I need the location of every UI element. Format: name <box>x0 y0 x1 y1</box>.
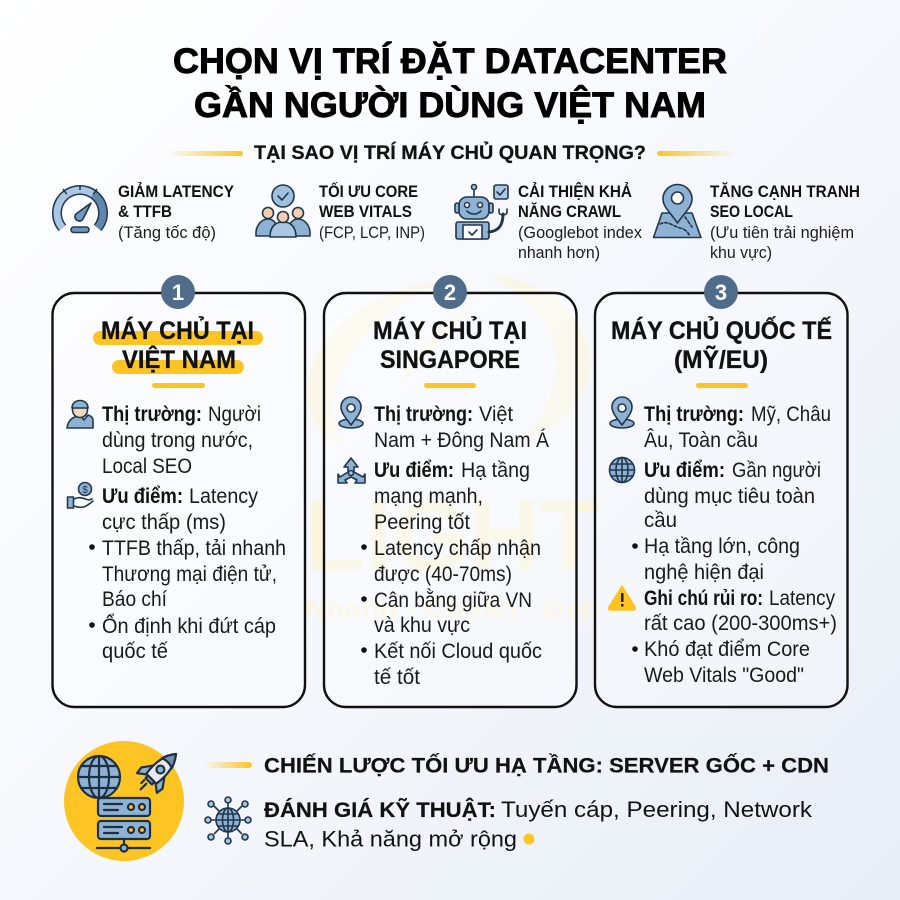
benefit: crawl: nhanh hơn) <box>518 244 600 262</box>
market text: Người <box>208 403 261 426</box>
subtitle with flanking lines <box>165 142 735 164</box>
card title: MÁY CHỦ TẠI <box>373 315 527 345</box>
benefit: local seo: (Ưu tiên trải nghiệm <box>710 224 854 242</box>
bullet list: Báo chí <box>102 588 167 611</box>
benefit: crawl: NĂNG CRAWL <box>518 202 621 221</box>
title <box>173 41 727 125</box>
watermark: LIGHT logo <box>305 275 600 623</box>
icon: user <box>67 400 93 428</box>
risk note: Khó đạt điểm Core <box>644 638 810 661</box>
bullet list: nghệ hiện đại <box>644 561 764 584</box>
bullet list: và khu vực <box>374 614 470 637</box>
technical evaluation text <box>264 797 813 852</box>
number badge 3 <box>704 275 738 309</box>
bullet list: Hạ tầng lớn, công <box>644 535 800 558</box>
risk note <box>632 587 837 687</box>
risk note: Ghi chú rủi ro: <box>644 587 763 610</box>
icon: location pin <box>339 397 363 428</box>
benefit: local seo: khu vực) <box>710 244 772 262</box>
strategy heading: CHIẾN LƯỢC TỐI ƯU HẠ TẦNG: SERVER GỐC + CDN <box>264 752 829 778</box>
market text: Nam + Đông Nam Á <box>374 429 549 452</box>
market text: Thị trường: <box>102 403 202 426</box>
icon: location pin <box>610 397 634 428</box>
benefit: crawl: (Googlebot index <box>518 224 643 242</box>
icon: speedometer <box>57 185 103 232</box>
benefit: local seo: SEO LOCAL <box>710 203 793 221</box>
market text: Âu, Toàn cầu <box>644 429 758 452</box>
title: GẦN NGƯỜI DÙNG VIỆT NAM <box>194 85 706 125</box>
icon: money hand: $ <box>82 485 88 496</box>
bullet list <box>632 535 800 584</box>
card title with highlights: MÁY CHỦ TẠI <box>101 315 254 345</box>
benefit: crawl <box>455 182 643 262</box>
card title: SINGAPORE <box>380 346 520 374</box>
benefit: core web vitals: TỐI ƯU CORE <box>319 181 418 201</box>
subtitle with flanking lines: TẠI SAO VỊ TRÍ MÁY CHỦ QUAN TRỌNG? <box>254 142 646 164</box>
benefit: crawl: CẢI THIỆN KHẢ <box>518 182 632 201</box>
bullet list: Kết nối Cloud quốc <box>374 640 542 663</box>
panel: server in Vietnam <box>52 275 305 707</box>
technical evaluation text: ĐÁNH GIÁ KỸ THUẬT: <box>264 797 496 822</box>
icon: map pin <box>654 184 701 238</box>
bullet list: quốc tế <box>102 640 168 663</box>
benefit: reduce latency: (Tăng tốc độ) <box>118 224 216 242</box>
bullet list: Latency chấp nhận <box>374 537 541 560</box>
card title with highlights: VIỆT NAM <box>122 344 236 374</box>
advantage text: Ưu điểm: <box>374 459 454 482</box>
globe <box>78 756 120 798</box>
bullet list: TTFB thấp, tải nhanh <box>102 537 286 560</box>
technical evaluation text: SLA, Khả năng mở rộng <box>264 826 517 852</box>
market text: Local SEO <box>102 455 192 478</box>
bullet list: Thương mại điện tử, <box>102 563 277 586</box>
market text: Mỹ, Châu <box>751 403 831 426</box>
benefit: core web vitals: WEB VITALS <box>319 203 412 221</box>
panel: server in Singapore <box>324 275 576 707</box>
icon: people with check <box>256 185 310 237</box>
advantage text <box>644 459 821 532</box>
icon: globe <box>610 458 634 482</box>
card title <box>373 315 527 374</box>
market text <box>102 403 261 478</box>
market text: Thị trường: <box>374 403 473 426</box>
advantage text: Ưu điểm: <box>102 485 183 508</box>
icon: yellow circle with globe, rocket, server <box>64 741 187 861</box>
watermark: LIGHT logo: LIGHT <box>305 480 600 592</box>
card title <box>611 315 832 374</box>
technical evaluation text: Tuyến cáp, Peering, Network <box>501 797 813 822</box>
market text: dùng trong nước, <box>102 429 253 452</box>
bullet list: được (40-70ms) <box>374 563 512 586</box>
watermark: LIGHT logo: Nhanh - Chuẩn - Đẹp <box>305 596 600 623</box>
bullet list <box>89 537 286 663</box>
benefit: core web vitals: (FCP, LCP, INP) <box>319 224 425 242</box>
risk note: Latency <box>769 587 835 610</box>
number badge 3: 3 <box>715 280 727 305</box>
advantage text <box>102 485 258 534</box>
benefit: local seo <box>654 182 860 262</box>
icon: money hand <box>68 482 93 508</box>
market text <box>374 403 549 452</box>
number badge 2 <box>433 275 467 309</box>
advantage text: cầu <box>644 509 677 532</box>
number badge 1: 1 <box>172 280 184 305</box>
panel: international server <box>595 275 848 707</box>
bullet list <box>361 537 542 689</box>
bullet list: Cân bằng giữa VN <box>374 589 532 612</box>
benefit: reduce latency: & TTFB <box>118 203 172 221</box>
risk note: Web Vitals "Good" <box>644 664 804 687</box>
advantage text: cực thấp (ms) <box>102 511 226 534</box>
advantage text: dùng mục tiêu toàn <box>644 485 815 508</box>
advantage text: Gần người <box>732 459 821 482</box>
benefit: reduce latency: GIẢM LATENCY <box>118 182 234 201</box>
icon: warning <box>609 586 635 610</box>
market text: Thị trường: <box>644 403 744 426</box>
rocket <box>130 743 187 800</box>
benefit: reduce latency <box>57 182 234 242</box>
icon: robot <box>455 184 508 239</box>
market text <box>644 403 831 452</box>
benefit: local seo: TĂNG CẠNH TRANH <box>710 182 860 201</box>
number badge 2: 2 <box>444 280 456 305</box>
advantage text: Hạ tầng <box>461 459 530 482</box>
bullet list: Ổn định khi đứt cáp <box>102 614 276 638</box>
advantage text: mạng mạnh, <box>374 485 483 508</box>
bullet list: tế tốt <box>374 666 420 689</box>
title: CHỌN VỊ TRÍ ĐẶT DATACENTER <box>173 41 727 81</box>
advantage text: Ưu điểm: <box>644 459 725 482</box>
card title with highlights <box>93 315 263 374</box>
benefit: core web vitals <box>256 181 425 242</box>
advantage text: Latency <box>189 485 258 508</box>
icon: network globe <box>205 797 251 844</box>
server <box>97 798 150 852</box>
risk note: rất cao (200-300ms+) <box>644 612 837 635</box>
advantage text <box>374 459 530 534</box>
card title: (MỸ/EU) <box>674 344 768 374</box>
advantage text: Peering tốt <box>374 511 470 534</box>
market text: Việt <box>479 403 513 426</box>
number badge 1 <box>161 275 195 309</box>
icon: three-way arrows <box>338 458 365 483</box>
card title: MÁY CHỦ QUỐC TẾ <box>611 315 832 345</box>
